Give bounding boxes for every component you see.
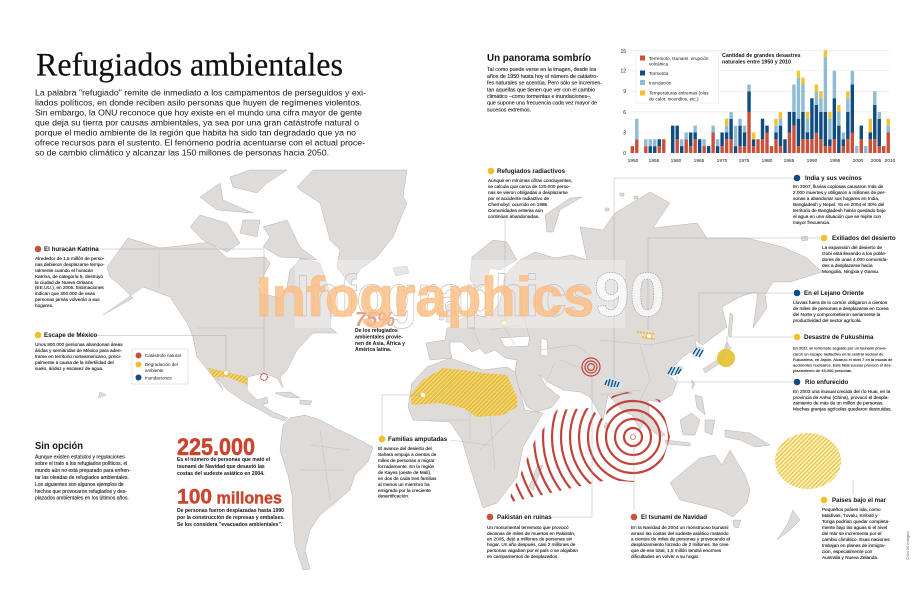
text block: sin opción: tar las oleadas de refugiados ambientales. [35, 475, 129, 481]
marker: Katrina [261, 374, 267, 380]
callout: países bajo el mar: trabajan en planes de inmigra- [822, 543, 886, 548]
landmass: South America [280, 415, 373, 570]
marker: Mali [420, 392, 426, 398]
marker: China floods [665, 364, 685, 378]
callout: tsunami de Navidad: El tsunami de Navidad [641, 514, 707, 521]
callout: desastre de Fukushima: plazamiento de 45.000 personas. [793, 368, 852, 373]
callout: escape de México: áridas y semiáridas de México para aden- [35, 348, 122, 353]
chart legend: volcánica [649, 62, 669, 66]
marker: tsunami epicentre [630, 434, 636, 440]
y axis labels: 6 [623, 110, 626, 116]
callout: tsunami de Navidad: desplazamiento forzado de 2 millones. Se cree [631, 542, 729, 547]
baseline and x axis labels: 1975 [739, 158, 750, 164]
callout: India y sus vecinos: 2.000 muertes y obligaron a millones de per- [793, 190, 886, 195]
chart legend: de calor, incendios, etc.) [649, 96, 699, 102]
callout: familias amputadas: de Kayes (oeste de Malí), [378, 470, 431, 475]
callout: refugiados radiactivos: Chernobyl, ocurrido en 1986. [488, 202, 548, 207]
callout: refugiados radiactivos: continúan abandonadas. [488, 214, 539, 219]
callout: exiliados del desierto: Exiliados del desierto [832, 235, 896, 242]
callout: Lejano Oriente: Lluvias fuera de lo común obligaron a cientos [793, 300, 888, 305]
callout: familias amputadas: Familias amputadas [388, 436, 448, 443]
heading: Un panorama sombrío [487, 52, 591, 64]
callout: India y sus vecinos: India y sus vecinos [805, 175, 862, 182]
text block: sin opción: mundo aún no está preparado para enfren- [35, 468, 131, 474]
callout: India y sus vecinos: En 2007, lluvias copiosas causaron más de [793, 184, 884, 189]
callout: Lejano Oriente: del Norte y comprometieron seriamente la [793, 312, 881, 317]
callout: tsunami de Navidad: En la Navidad de 2004 un monstruoso tsunami [631, 525, 728, 530]
baseline and x axis labels: 1990 [807, 158, 818, 164]
intro text [35, 88, 366, 158]
callout: Pakistán en ruinas: hogar. Un año después, casi 2 millones de [487, 542, 576, 547]
callout: huracán Katrina [35, 246, 105, 308]
baseline and x axis labels: 1965 [694, 158, 705, 164]
callout: Lejano Oriente: de miles de personas a desplazarse en Corea [793, 306, 889, 311]
watermark: 90 [594, 261, 665, 330]
chart legend: Inundación [649, 80, 672, 86]
text block: sin opción: Aunque existen estatutos y regulaciones [35, 454, 125, 460]
callout: río enfurecido [793, 379, 892, 412]
callout: refugiados radiactivos: Comunidades enteras aún [488, 208, 543, 213]
baseline and x axis labels: 1995 [830, 158, 841, 164]
callout: escape de México: trarse en territorio norteamericano, princi- [35, 354, 122, 359]
callout: río enfurecido: En 2003 una inusual crecida del río Huai, en la [793, 389, 891, 394]
leader lines [70, 178, 853, 517]
callout: países bajo el mar: Pequeños países isla, como [822, 507, 881, 512]
callout: India y sus vecinos [793, 175, 886, 225]
callout: Lejano Oriente: productividad del sector agrícola. [793, 318, 862, 323]
intro text: liados políticos, en donde reciben asilo personas que huyen de regímenes violentos. [35, 98, 362, 108]
callout: familias amputadas: miles de personas a migrar [378, 458, 435, 463]
callout: escape de México [35, 332, 123, 371]
title: Refugiados ambientales [36, 48, 343, 84]
callout: tsunami de Navidad: dificultades en volver a su hogar. [631, 554, 699, 559]
country borders [159, 250, 695, 500]
chart legend [636, 52, 718, 103]
baseline and x axis labels: 1970 [717, 158, 728, 164]
callout: tsunami de Navidad [631, 514, 730, 559]
intro text: porque el medio ambiente de la región que habita ha sido tan degradado que ya no [35, 128, 356, 138]
callout: huracán Katrina: (EE.UU.), en 2005. Estimaciones [35, 285, 104, 290]
callout: exiliados del desierto [821, 235, 896, 274]
landmass: Scandinavia and Arctic islands [439, 197, 582, 322]
callout: refugiados radiactivos [488, 168, 572, 219]
map legend: Degradación del [145, 362, 178, 367]
callout: familias amputadas: desertificación. [378, 494, 409, 498]
body text: que supone una frecuencia cada vez mayor de [487, 101, 597, 107]
callout: familias amputadas: El avance del desierto del [378, 446, 432, 451]
callout: Pakistán en ruinas: en campamentos de desplazados. [487, 554, 558, 559]
big number: 100 millones: 100 millones [177, 484, 282, 508]
baseline and x axis labels: 1960 [671, 158, 682, 164]
callout: huracán Katrina: personas jamás volverán a sus [35, 297, 100, 302]
callout: huracán Katrina: El huracán Katrina [44, 246, 99, 253]
callout: huracán Katrina: Katrina, de categoría 5, destruyó [35, 274, 103, 279]
chart title: Cantidad de grandes desastres [722, 53, 801, 59]
callout: exiliados del desierto: dores de unas 4.000 comunida- [822, 257, 888, 262]
callout: desastre de Fukushima: accidentes nucleares. Este fatal suceso provocó el des- [793, 362, 892, 368]
marker: Chernobyl [502, 321, 506, 325]
baseline and x axis labels: 1985 [784, 158, 795, 164]
callout: desastre de Fukushima: Fukushima, en Japón. Alcanzó el nivel 7 en la escala de [793, 357, 893, 362]
callout: desastre de Fukushima [793, 334, 893, 373]
landmass: Japan, Sakhalin, Southeast Asia [604, 313, 770, 447]
landmass: Madagascar [529, 465, 543, 490]
text block: sin opción: hechos que provocaron refugiados y des- [35, 489, 127, 495]
callout: exiliados del desierto: La expansión del desierto de [822, 245, 882, 250]
landmass: Australia and New Zealand [670, 450, 800, 540]
big number: 100 millones: por la construcción de represas y embalses. [177, 515, 285, 521]
marker: Bangladesh floods [602, 376, 624, 390]
callout: familias amputadas: al menos un miembro ha [378, 482, 430, 487]
callout: escape de México: Escape de México [44, 332, 98, 339]
big number: 100 millones: Se los considera "evacuados ambientales". [177, 522, 283, 528]
callout: 75 por ciento [355, 309, 405, 353]
callout: países bajo el mar: del mar se incrementa por el [822, 531, 881, 536]
callout: refugiados radiactivos: nas se vieron obligadas a desplazarse [488, 190, 568, 195]
callout: 75 por ciento: De los refugiados [355, 328, 398, 334]
big number: 225.000: 225.000 [177, 434, 255, 461]
callout: Pakistán en ruinas: Pakistán en ruinas [497, 514, 552, 521]
gridlines [630, 50, 890, 132]
chart title [722, 53, 801, 66]
callout: escape de México: Unos 900.000 personas abandonan áreas [35, 342, 123, 347]
intro text: Sin embargo, la ONU reconoce que hoy existe en el mundo una cifra mayor de gente [35, 108, 362, 118]
text block: sin opción: sobre el trato a los refugiados políticos, el [35, 461, 127, 467]
y axis labels [620, 49, 626, 157]
landmass: Africa [408, 358, 543, 508]
callout: países bajo el mar: mente bajo las aguas si el nivel [822, 525, 887, 530]
callout: desastre de Fukushima: Desastre de Fukushima [804, 334, 874, 341]
callout: familias amputadas: forzadamente. En la región [378, 464, 435, 469]
chart title: naturales entre 1950 y 2010 [722, 60, 791, 66]
callout: 75 por ciento: nen de Asia, África y [355, 340, 405, 347]
callout: Lejano Oriente [793, 290, 889, 323]
callout: escape de México: palmente a causa de la infertilidad del [35, 360, 114, 365]
map legend [132, 349, 188, 384]
callout: países bajo el mar: Australia y Nueva Zelanda. [822, 555, 878, 560]
seas: Black Sea and Caspian [500, 336, 548, 356]
tsunami rings [510, 392, 670, 502]
body text: sucesos extremos. [487, 108, 531, 114]
callout: refugiados radiactivos: Aunque en mínimas cifras concluyentes, [488, 178, 572, 183]
callout: tsunami de Navidad: a cientos de miles de personas y provocando el [631, 536, 730, 542]
callout: India y sus vecinos: mayor frecuencia. [793, 220, 830, 225]
stacked bars [631, 50, 890, 153]
big number: 225.000: tsunami de Navidad que desastó las [177, 464, 265, 470]
panel: un panorama sombrío [487, 52, 602, 114]
callout: países bajo el mar: Tonga podrían quedar completa- [822, 519, 890, 524]
big number: 225.000: Es el número de personas que mató el [177, 457, 271, 463]
desert degradation: Sahara [410, 368, 517, 417]
callout: países bajo el mar: Países bajo el mar [832, 497, 887, 504]
callout: familias amputadas: emigrado por la creciente [378, 488, 431, 493]
callout: río enfurecido: Río enfurecido [805, 379, 849, 386]
callout: huracán Katrina: Alrededor de 1,5 millón de perso- [35, 256, 105, 261]
body text: Tal como puede verse en la imagen, desde los [487, 67, 597, 73]
marker: Korea floods [690, 345, 706, 359]
callout: India y sus vecinos: territorio de Bangladesh había quedado bajo [793, 208, 886, 213]
world map [70, 170, 853, 572]
callout: Pakistán en ruinas: en 2005, dejó a millones de personas sin [487, 536, 573, 542]
baseline and x axis labels [628, 158, 896, 164]
callout: 75 por ciento: América latina. [355, 347, 392, 353]
marker: Pakistan earthquake [582, 358, 600, 376]
callout: exiliados del desierto: Gobi está llevando a los poble- [822, 251, 887, 256]
big number: 225.000 [177, 434, 271, 477]
chart legend: Tormenta [649, 71, 669, 76]
callout: escape de México: suelo, áridez y escasez de agua. [35, 366, 103, 371]
y axis labels: 3 [623, 130, 626, 136]
body text: tan aquellas que tienen que ver con el cambio [487, 87, 595, 93]
callout: huracán Katrina: la ciudad de Nueva Orleans [35, 280, 94, 285]
callout: huracán Katrina: nas debieron desplazarse tempo- [35, 262, 105, 267]
callout: familias amputadas: en dos de cada tres familias [378, 476, 437, 481]
y axis labels: 0 [623, 151, 626, 157]
callout: familias amputadas [378, 436, 448, 498]
callout: países bajo el mar: ción, especialmente con [822, 549, 873, 554]
body text: años de 1950 hasta hoy el número de catástro- [487, 74, 598, 80]
callout: río enfurecido: provincia de Anhui (China), provocó el despla- [793, 395, 889, 400]
credit: ©Sol 90 Images [905, 531, 910, 560]
callout: refugiados radiactivos: Refugiados radiactivos [497, 168, 566, 175]
callout: huracán Katrina: hogares. [35, 303, 53, 308]
callout: exiliados del desierto: des a desplazarse hacia [822, 263, 873, 268]
chart legend: Temperaturas extremas (olas [649, 90, 709, 96]
intro text: La palabra "refugiado" remite de inmediato a los campamentos de perseguidos y exi- [35, 88, 366, 98]
callout: Pakistán en ruinas [487, 514, 578, 559]
text block: sin opción: Sin opción [35, 441, 83, 452]
landmass: North America [103, 238, 337, 421]
callout: tsunami de Navidad: arrasó las costas del sudeste asiático matando [631, 531, 729, 536]
big number: 225.000: costas del sudeste asiático en 2004. [177, 471, 265, 477]
watermark: Infographics [256, 265, 594, 328]
baseline and x axis labels: 1950 [628, 158, 639, 164]
landmass: Canadian Arctic islands [190, 170, 317, 260]
callout: India y sus vecinos: el agua en una situación que se repite con [793, 214, 881, 219]
callout: Pakistán en ruinas: Un monumental terremoto que provocó [487, 525, 569, 530]
callout: huracán Katrina: indican que 300.000 de esas [35, 291, 96, 296]
desert degradation: Mongolia [637, 332, 655, 339]
callout: refugiados radiactivos: se calcula que cerca de 120.000 perso- [488, 184, 571, 189]
watermark: Infographics [296, 264, 594, 329]
y axis labels: 15 [620, 49, 626, 55]
callout: países bajo el mar: Maldivas, Tuvalu, Kiribati y [822, 513, 878, 518]
callout: países bajo el mar [821, 497, 890, 560]
baseline and x axis labels: 2000 [853, 158, 864, 164]
callout: India y sus vecinos: Bangladesh y Nepal. Ya en 2004 el 30% del [793, 202, 884, 207]
intro text: ofrece recursos para el sustento. El fenómeno podría acentuarse con el actual proce- [35, 138, 365, 148]
map legend: Inundaciones [145, 376, 173, 380]
map legend: Catástrofe natural [145, 353, 181, 358]
callout: huracán Katrina: ralmente cuando el huracán [35, 268, 94, 273]
callout: familias amputadas: Sahara empuja a cientos de [378, 452, 437, 457]
baseline and x axis labels: 2005 [871, 158, 882, 164]
callout: países bajo el mar: cambio climático. Esas naciones [822, 537, 890, 542]
callout: Lejano Oriente: En el Lejano Oriente [804, 290, 864, 297]
callout: desastre de Fukushima: En 2011 un terremoto seguido por un tsunami provo- [793, 346, 887, 350]
body text: climático –como tormentas e inundaciones–, [487, 94, 592, 100]
landmass: Caribbean, Iceland and small islands [98, 193, 808, 405]
body text: fes naturales se acentúa. Pero sólo se incremen- [487, 81, 602, 87]
callout: desastre de Fukushima: caron un escape radiactivo en la central nuclear de [793, 352, 884, 356]
callout: tsunami de Navidad: que de ese total, 1,5 millón tendrá enormes [631, 548, 722, 553]
baseline and x axis labels: 1955 [649, 158, 660, 164]
text block: sin opción [35, 441, 131, 502]
callout: río enfurecido: zamiento de más de un millón de personas. [793, 400, 884, 406]
text block: sin opción: plazados ambientales en los últimos años. [35, 496, 129, 502]
stacked bar chart: desastres 1950-2010 [620, 49, 896, 164]
desert degradation: Mexico [208, 368, 247, 385]
intro text: so de cambio climático y alcanzar las 150 millones de personas hacia 2050. [35, 148, 329, 158]
body text [487, 67, 602, 114]
big number: 100 millones [177, 484, 285, 528]
callout: Pakistán en ruinas: personas vagaban por el país o se alojaban [487, 548, 578, 553]
callout: Pakistán en ruinas: decenas de miles de muertos en Pakistán, [487, 531, 575, 536]
landmass: Eurasia [426, 192, 822, 430]
callout: río enfurecido: Muchas granjas agrícolas quedaron destruidas. [793, 406, 892, 412]
sea level: Pacific islands [775, 433, 841, 489]
chart legend: Terremoto, tsunami, erupción [649, 56, 709, 61]
callout: refugiados radiactivos: por el accidente radiactivo de [488, 196, 549, 201]
callout: exiliados del desierto: Mongolia, Ningxia y Gansu. [822, 269, 879, 274]
y axis labels: 12 [620, 68, 626, 74]
baseline and x axis labels: 2010 [885, 158, 896, 164]
big number: 100 millones: De personas fueron desplazadas hasta 1990 [177, 508, 284, 514]
callout: 75 por ciento: ambientales provie- [355, 334, 403, 340]
callout: India y sus vecinos: sonas a abandonar sus hogares en India, [793, 196, 879, 201]
landmass: Greenland [297, 170, 407, 285]
y axis labels: 9 [623, 89, 626, 95]
text block: sin opción: Los siguientes son algunos ejemplos de [35, 482, 124, 488]
marker: Gobi [647, 334, 651, 338]
baseline and x axis labels: 1980 [762, 158, 773, 164]
intro text: que deja su tierra por causas ambientales, ya sea por una gran catástrofe natural o [35, 118, 359, 128]
callout: 75 por ciento: 75% [355, 309, 395, 331]
marker: Fukushima [717, 349, 735, 367]
marker: Mexico [224, 371, 228, 375]
map legend: ambiente [145, 368, 164, 373]
